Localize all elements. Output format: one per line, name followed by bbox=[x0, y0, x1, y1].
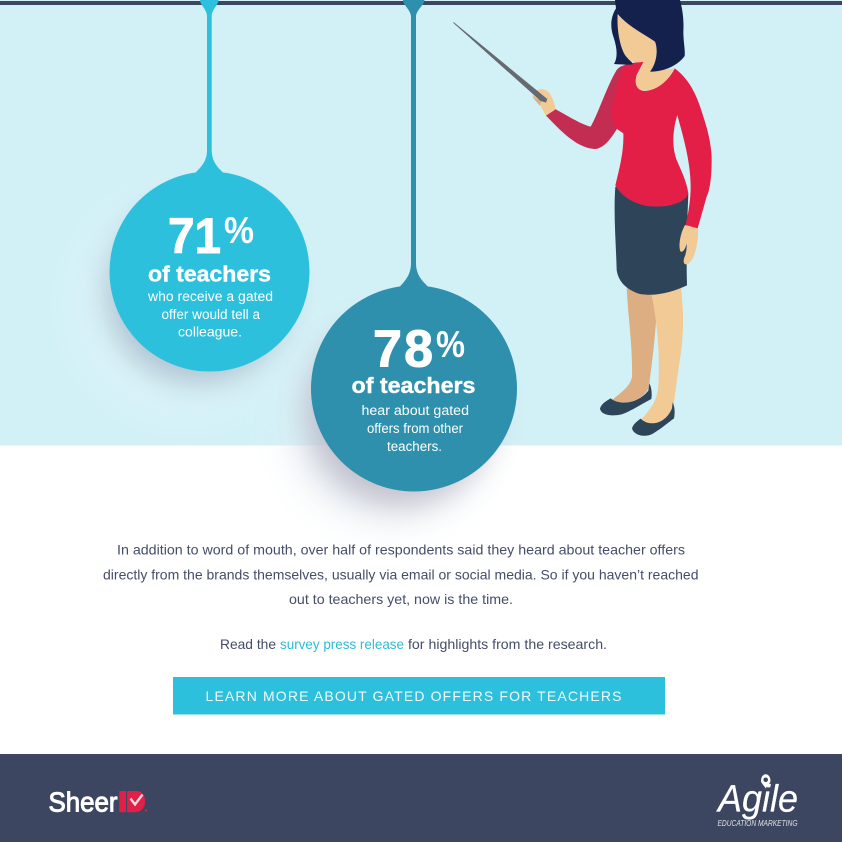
head bbox=[611, 0, 685, 91]
torso sweater bbox=[611, 61, 712, 228]
body paragraph: out to teachers yet, now is the time. bbox=[289, 591, 513, 607]
subheading: of teachers bbox=[352, 373, 476, 398]
hanging pin bbox=[400, 0, 428, 287]
sleeve, pointing arm bbox=[546, 63, 637, 149]
skirt bbox=[615, 187, 688, 295]
description: who receive a gated bbox=[147, 289, 273, 304]
map pin bbox=[761, 774, 770, 788]
lower hand bbox=[679, 225, 698, 264]
top bar bbox=[0, 1, 842, 5]
description bbox=[362, 403, 469, 454]
logo: Agile: EDUCATION MARKETING bbox=[718, 819, 798, 828]
stat bubble: 71% bbox=[110, 0, 310, 372]
background panel bbox=[0, 0, 842, 446]
body paragraph bbox=[103, 542, 698, 607]
description: offers from other bbox=[367, 421, 463, 436]
hanging pin bbox=[195, 0, 224, 173]
back shoe bbox=[600, 383, 652, 415]
circle shadow 1 bbox=[85, 200, 290, 405]
logo: SheerID: Sheer bbox=[48, 786, 118, 818]
description: offer would tell a bbox=[162, 307, 260, 322]
big number: 71 bbox=[168, 208, 221, 264]
body paragraph: In addition to word of mouth, over half of respondents said they heard about teacher offers bbox=[117, 542, 685, 558]
call to action button bbox=[173, 677, 665, 714]
hair bbox=[611, 0, 685, 72]
face and neck bbox=[617, 14, 674, 91]
subheading: of teachers bbox=[148, 262, 271, 286]
bubble bbox=[311, 286, 517, 492]
logo: SheerID: ID bbox=[118, 787, 145, 819]
press release line bbox=[220, 636, 607, 652]
front leg bbox=[641, 287, 683, 425]
upper body bbox=[453, 22, 712, 228]
stat bubble: 78% bbox=[311, 0, 517, 492]
back leg bbox=[611, 288, 657, 403]
hand bbox=[533, 89, 555, 116]
big number: 78 bbox=[373, 320, 433, 378]
description: colleague. bbox=[178, 324, 242, 340]
link: survey press release bbox=[280, 636, 404, 652]
press release line: Read the bbox=[220, 636, 276, 652]
press release line: for highlights from the research. bbox=[408, 636, 607, 652]
pointer stick bbox=[453, 22, 547, 103]
legs and shoes bbox=[600, 187, 698, 436]
percent sign: % bbox=[436, 324, 465, 365]
teacher illustration bbox=[453, 0, 712, 436]
call to action button: LEARN MORE ABOUT GATED OFFERS FOR TEACHERS bbox=[206, 688, 622, 704]
footer band bbox=[0, 754, 842, 842]
description: teachers. bbox=[387, 439, 442, 454]
bubble bbox=[110, 172, 310, 372]
body paragraph: directly from the brands themselves, usually via email or social media. So if you haven’t reached bbox=[103, 566, 698, 582]
circle shadow 2 bbox=[290, 318, 494, 520]
description: hear about gated bbox=[362, 403, 469, 418]
description bbox=[147, 289, 273, 340]
front shoe bbox=[632, 402, 675, 436]
logo: Agile: Agile bbox=[716, 778, 798, 820]
percent sign: % bbox=[224, 210, 254, 251]
